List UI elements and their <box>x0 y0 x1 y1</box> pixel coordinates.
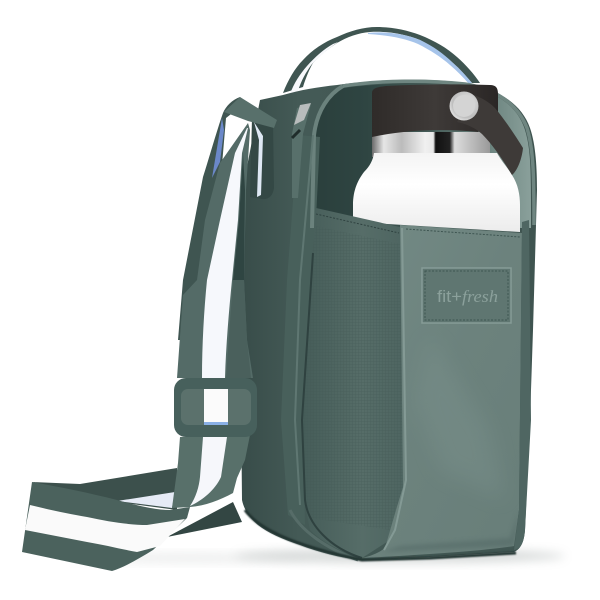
bag bottom edge <box>245 510 516 560</box>
bag main body <box>240 80 537 560</box>
pocket front panel <box>362 225 522 558</box>
panel top stitch <box>406 229 520 237</box>
right gusset <box>514 220 531 550</box>
rear lower strap <box>32 468 177 510</box>
pocket mesh side <box>301 208 403 558</box>
rear strap under loop <box>167 502 242 537</box>
mesh hem stitch <box>316 214 399 233</box>
pocket hem dark edge <box>302 253 362 558</box>
strap end <box>22 482 190 571</box>
bottle neck <box>372 132 490 157</box>
blue strap lining <box>212 118 224 178</box>
panel bottom shade <box>382 510 519 552</box>
bag interior back panel <box>312 84 531 228</box>
strap tab <box>224 97 277 128</box>
handle white stripe <box>290 42 338 94</box>
top carry handle <box>283 27 480 94</box>
strap loop <box>250 118 274 199</box>
zipper pull <box>292 103 311 198</box>
top rim highlight <box>343 81 534 225</box>
zipper gusset band <box>281 135 320 525</box>
mesh texture <box>301 226 403 530</box>
zipper rim <box>312 86 343 228</box>
band seam line <box>295 135 313 505</box>
fit+fresh logo patch <box>422 268 511 323</box>
bottle body <box>353 153 520 232</box>
strap below buckle <box>172 435 250 508</box>
bottle carry strap <box>457 94 523 175</box>
ground shadow <box>70 549 565 563</box>
handle blue stripe <box>368 32 472 84</box>
bottle <box>353 84 523 232</box>
lower seam curve <box>290 510 358 560</box>
slider buckle <box>174 378 257 437</box>
panel left seam <box>384 228 406 550</box>
panel soft light <box>415 335 505 500</box>
logo text: fit+fresh <box>437 287 498 306</box>
bottle cap <box>372 84 498 137</box>
front shoulder strap above buckle <box>177 123 253 378</box>
rear shoulder strap <box>178 97 244 340</box>
bottle knob <box>450 92 478 120</box>
lower white lining <box>117 492 175 508</box>
